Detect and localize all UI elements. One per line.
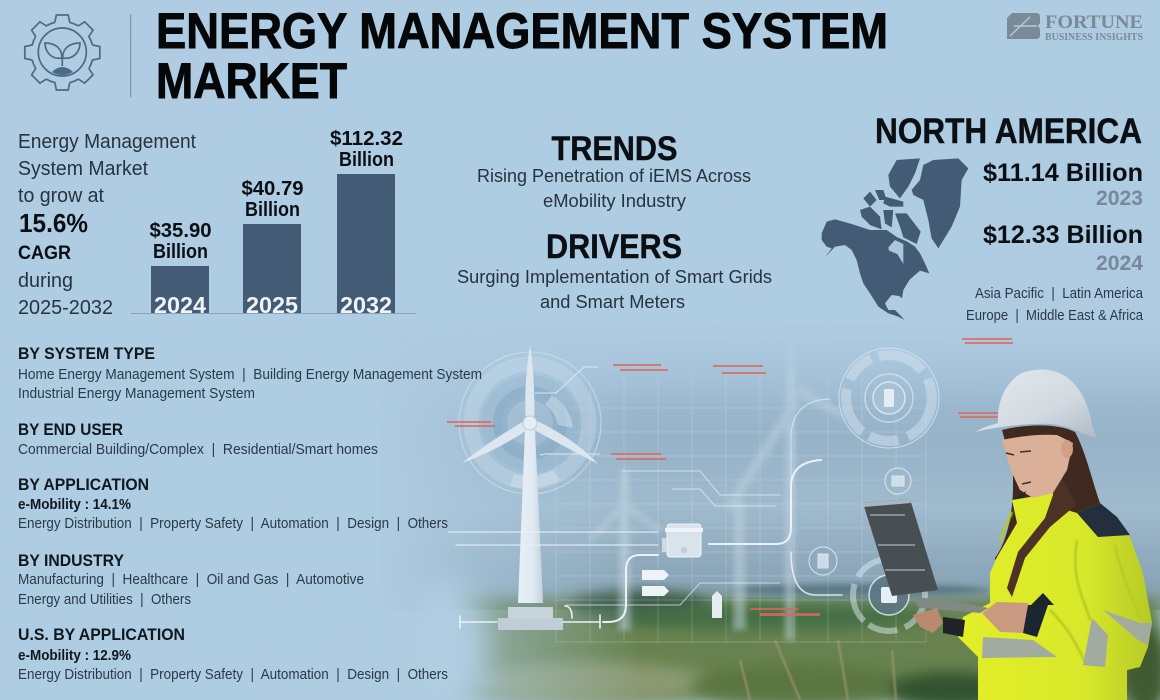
- bar 2025: $40.79: [242, 178, 304, 200]
- bar 2025: Billion: [245, 199, 300, 221]
- segment: by end user: [18, 420, 378, 458]
- bar 2024: $35.90: [150, 220, 212, 242]
- HUD connecting lines and devices: [449, 399, 842, 628]
- hair back: [995, 425, 1100, 598]
- title: MARKET: [156, 53, 347, 109]
- jacket: [958, 493, 1152, 700]
- device: meter: [662, 524, 703, 557]
- segment: by end user: Commercial Building/Complex | Residential/Smart homes: [18, 442, 378, 458]
- segment: by application: Energy Distribution | Property Safety | Automation | Design | Others: [18, 516, 448, 532]
- trends block: TRENDS: [552, 130, 678, 168]
- trends block: [477, 130, 751, 211]
- title: ENERGY MANAGEMENT SYSTEM: [156, 3, 888, 59]
- segment: by end user: BY END USER: [18, 420, 123, 439]
- bar 2025: 2025: [246, 292, 298, 318]
- bar 2024: [150, 220, 212, 318]
- CAGR text block: 2025-2032: [18, 297, 113, 319]
- face: [1002, 435, 1073, 498]
- HUD battery dial: [839, 348, 939, 448]
- bar 2032: 2032: [340, 292, 392, 318]
- segment: U.S. by application: [18, 625, 448, 683]
- regional stats: $12.33 Billion: [983, 221, 1143, 249]
- bar chart: market size: [131, 128, 416, 318]
- segment: by industry: BY INDUSTRY: [18, 551, 125, 570]
- segment: by system type: Industrial Energy Management System: [18, 386, 255, 402]
- dark shoulder: [1077, 503, 1130, 537]
- segment: by application: [18, 475, 448, 532]
- hair front strands: [1007, 470, 1076, 597]
- regional stats: $11.14 Billion: [983, 159, 1143, 187]
- bar 2024: 2024: [154, 292, 206, 318]
- HUD small circle icons: [809, 468, 911, 575]
- blurred distant turbines: [590, 330, 845, 640]
- CAGR text block: to grow at: [18, 185, 104, 207]
- CAGR text block: Energy Management: [18, 131, 196, 153]
- CAGR text block: during: [18, 270, 73, 292]
- CAGR text block: [18, 131, 196, 319]
- segment: by system type: [18, 344, 482, 402]
- regional stats: Asia Pacific | Latin America: [975, 286, 1144, 302]
- segment: by application: e-Mobility : 14.1%: [18, 497, 131, 513]
- segment: by system type: BY SYSTEM TYPE: [18, 344, 155, 363]
- logo: Fortune Business Insights: [1007, 12, 1143, 43]
- eyes and mouth: [1006, 451, 1031, 484]
- tablet: [910, 597, 988, 613]
- HUD ring around main turbine: [459, 352, 601, 494]
- right hand: [982, 602, 1028, 633]
- hard hat: [975, 369, 1097, 438]
- CAGR text block: System Market: [18, 158, 148, 180]
- HUD vehicle dial: [853, 559, 925, 631]
- HUD red data labels: [447, 338, 1013, 616]
- segment: U.S. by application: e-Mobility : 12.9%: [18, 648, 131, 664]
- glove: [943, 617, 965, 637]
- segment: U.S. by application: Energy Distribution | Property Safety | Automation | Design | Others: [18, 667, 448, 683]
- bar 2032: Billion: [339, 149, 394, 171]
- left hand: [913, 608, 943, 633]
- regional stats: [875, 112, 1144, 324]
- trends block: eMobility Industry: [543, 191, 686, 211]
- bar 2032: $112.32: [330, 128, 403, 150]
- segment: by application: BY APPLICATION: [18, 475, 149, 494]
- segment: by industry: Energy and Utilities | Others: [18, 592, 191, 608]
- photo: engineer: [910, 369, 1152, 700]
- bar 2024: Billion: [153, 241, 208, 263]
- drivers block: [457, 228, 772, 312]
- icon: North America map: [822, 158, 968, 320]
- main wind turbine: [462, 345, 598, 630]
- segment: by industry: [18, 551, 364, 608]
- regional stats: Europe | Middle East & Africa: [966, 308, 1144, 324]
- ear: [1061, 440, 1073, 458]
- bar 2025: [242, 178, 304, 318]
- segment: U.S. by application: U.S. BY APPLICATION: [18, 625, 185, 644]
- icon: gear with sprout: [24, 15, 100, 90]
- device: arrow block: [712, 591, 722, 618]
- drivers block: DRIVERS: [546, 228, 682, 266]
- CAGR text block: CAGR: [18, 243, 71, 264]
- segment: by industry: Manufacturing | Healthcare | Oil and Gas | Automotive: [18, 572, 364, 588]
- regional stats: 2024: [1096, 252, 1143, 275]
- jacket folds: [1000, 512, 1140, 662]
- trends block: Rising Penetration of iEMS Across: [477, 166, 751, 186]
- reflective stripes: [982, 610, 1152, 667]
- photo: wind farm landscape background: [424, 366, 1160, 700]
- logo: Fortune Business Insights: FORTUNE: [1045, 12, 1143, 33]
- HUD grid overlay: [556, 373, 926, 642]
- header divider: [130, 14, 131, 97]
- device: tags: [642, 570, 669, 596]
- CAGR text block: 15.6%: [19, 208, 88, 238]
- drivers block: Surging Implementation of Smart Grids: [457, 267, 772, 287]
- photo: laptop: [863, 499, 938, 596]
- logo: Fortune Business Insights: BUSINESS INSIGHTS: [1045, 32, 1143, 43]
- drivers block: and Smart Meters: [540, 292, 685, 312]
- collar shadow: [1012, 491, 1026, 500]
- cuff: [1023, 593, 1054, 637]
- title: [156, 3, 888, 109]
- segment: by system type: Home Energy Management System | Building Energy Management System: [18, 367, 482, 383]
- bar 2032: [330, 128, 403, 318]
- regional stats: 2023: [1096, 187, 1143, 210]
